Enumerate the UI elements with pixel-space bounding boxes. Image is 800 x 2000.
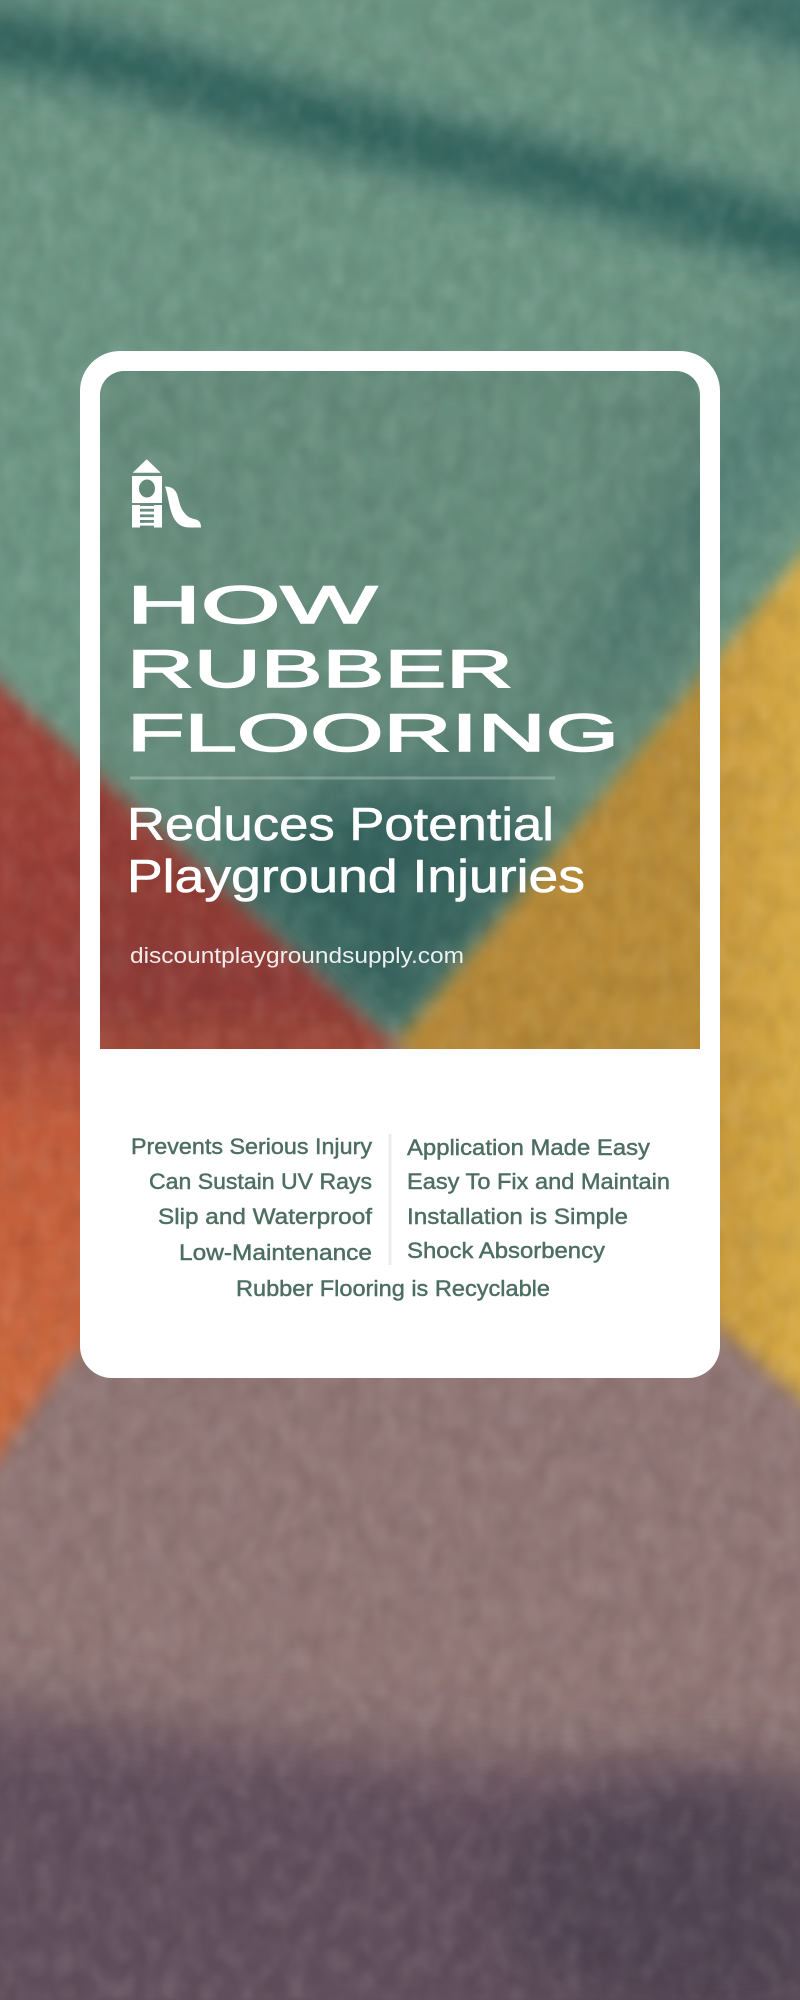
title: FLOORING bbox=[127, 704, 619, 763]
icon: playground tower and slide bbox=[132, 459, 201, 528]
benefits list: right column: Application Made Easy bbox=[407, 1135, 651, 1160]
title: HOW bbox=[127, 576, 377, 635]
website url: discountplaygroundsupply.com bbox=[130, 943, 464, 968]
title: RUBBER bbox=[127, 640, 513, 699]
benefits list: left column: Can Sustain UV Rays bbox=[149, 1169, 372, 1194]
benefits list: right column: Installation is Simple bbox=[407, 1204, 628, 1229]
benefits list: right column: Easy To Fix and Maintain bbox=[407, 1169, 670, 1194]
subtitle: Playground Injuries bbox=[127, 850, 585, 902]
benefits list: left column: Prevents Serious Injury bbox=[131, 1134, 373, 1159]
subtitle: Reduces Potential bbox=[127, 798, 554, 850]
benefits list: closing line: Rubber Flooring is Recyclable bbox=[236, 1276, 550, 1301]
title bbox=[127, 576, 619, 763]
benefits list: right column bbox=[407, 1135, 670, 1263]
benefits list: left column: Slip and Waterproof bbox=[158, 1204, 373, 1229]
benefits list: left column bbox=[131, 1134, 373, 1265]
subtitle bbox=[127, 798, 585, 902]
benefits list: left column: Low-Maintenance bbox=[179, 1240, 372, 1265]
benefits list: right column: Shock Absorbency bbox=[407, 1238, 606, 1263]
white card frame bbox=[80, 351, 720, 1378]
